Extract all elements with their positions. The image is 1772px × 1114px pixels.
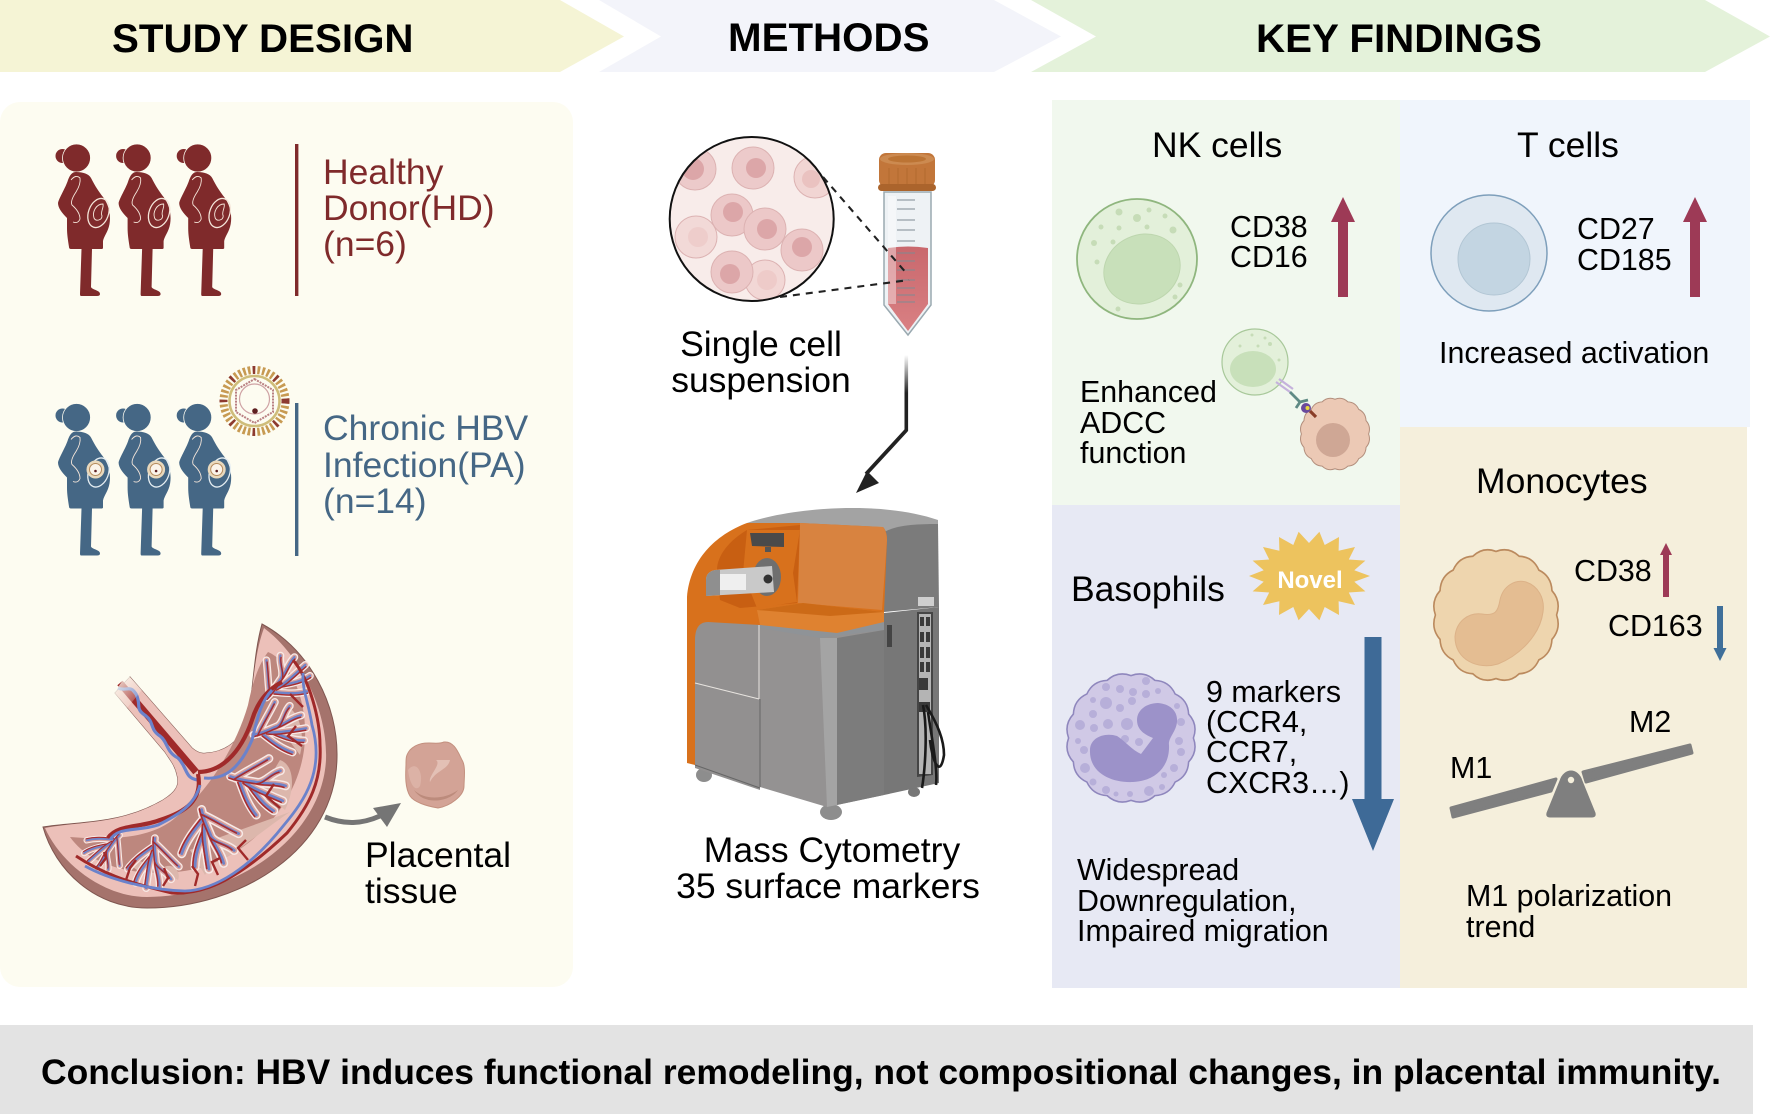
label: healthy donor: Healthy — [323, 152, 444, 192]
header: study design — [0, 0, 624, 72]
icon: NK cell with antibody engaging target — [1222, 329, 1369, 470]
label: enhanced ADCC function — [1080, 375, 1217, 470]
label: CD163 down — [1608, 606, 1726, 661]
label: CD38 CD16: CD16 — [1230, 240, 1308, 274]
icon: basophil — [1067, 674, 1195, 802]
label: placental tissue: Placental — [365, 835, 511, 875]
heading: basophils: Basophils — [1071, 569, 1225, 609]
panel: basophils — [1052, 505, 1400, 988]
panel: NK cells — [1052, 100, 1400, 505]
arrow: up — [1331, 197, 1355, 297]
label: CD38 CD16 — [1230, 210, 1308, 274]
label: widespread downregulation: Downregulation, — [1077, 884, 1297, 918]
label: enhanced ADCC function: Enhanced — [1080, 375, 1217, 409]
label: M1: M1 — [1450, 751, 1492, 785]
group: healthy donors — [56, 144, 495, 296]
label: CD38 up — [1574, 543, 1672, 597]
icon: mass cytometer — [687, 508, 944, 820]
label: CD163 down: CD163 — [1608, 609, 1703, 643]
label: enhanced ADCC function: ADCC — [1080, 406, 1166, 440]
illustration: placenta cross-section — [43, 624, 337, 908]
label: mass cytometry: 35 surface markers — [676, 866, 980, 906]
icon: three pregnant women, healthy — [56, 144, 234, 296]
arrow: to placental tissue — [325, 803, 401, 827]
label: M1 polarization trend: trend — [1466, 910, 1535, 944]
icon: monocyte — [1434, 550, 1558, 680]
label: mass cytometry — [676, 830, 980, 906]
label: M1 polarization trend — [1466, 879, 1672, 944]
icon: seesaw tilted to M1 — [1451, 745, 1692, 817]
label: placental tissue: tissue — [365, 871, 458, 911]
label: single cell suspension: suspension — [671, 360, 851, 400]
label: CD38 CD16: CD38 — [1230, 210, 1308, 244]
label: widespread downregulation: Impaired migration — [1077, 914, 1329, 948]
label: nine markers: 9 markers — [1206, 675, 1341, 709]
label: CD27 CD185 — [1577, 212, 1672, 277]
panel: monocytes — [1400, 427, 1747, 988]
icon: T cell — [1431, 195, 1547, 311]
badge: novel: Novel — [1277, 567, 1343, 594]
label: widespread downregulation — [1077, 853, 1329, 948]
label: nine markers: CXCR3…) — [1206, 766, 1350, 800]
header: study design: STUDY DESIGN — [112, 16, 414, 61]
arrow: down — [1352, 637, 1394, 851]
heading: monocytes: Monocytes — [1476, 461, 1648, 501]
header: methods — [599, 0, 1061, 72]
heading: T cells: T cells — [1517, 125, 1619, 165]
label: mass cytometry: Mass Cytometry — [704, 830, 960, 870]
group: chronic HBV infection — [56, 370, 529, 556]
icon: NK cell — [1077, 199, 1197, 319]
header: methods: METHODS — [728, 15, 930, 60]
label: healthy donor — [323, 152, 495, 264]
label: increased activation: Increased activation — [1439, 336, 1709, 370]
label: single cell suspension — [671, 324, 851, 400]
label: chronic HBV infection: Chronic HBV — [323, 408, 529, 448]
icon: hepatitis B virus — [224, 370, 286, 432]
header: key findings — [1031, 0, 1770, 72]
label: healthy donor: Donor(HD) — [323, 188, 495, 228]
label: nine markers: (CCR4, — [1206, 705, 1307, 739]
label: CD38 up: CD38 — [1574, 554, 1652, 588]
badge: novel — [1249, 532, 1370, 620]
icon: three pregnant women, infected — [56, 404, 234, 556]
label: chronic HBV infection: (n=14) — [323, 481, 427, 521]
label: CD27 CD185: CD27 — [1577, 212, 1655, 246]
arrow: up — [1683, 197, 1707, 297]
label: healthy donor: (n=6) — [323, 224, 407, 264]
label: CD27 CD185: CD185 — [1577, 243, 1672, 277]
conclusion banner — [0, 1025, 1753, 1114]
label: widespread downregulation: Widespread — [1077, 853, 1239, 887]
icon: magnified cell suspension — [670, 137, 836, 301]
panel: study design — [0, 102, 573, 987]
header: key findings: KEY FINDINGS — [1256, 16, 1542, 61]
label: chronic HBV infection: Infection(PA) — [323, 445, 526, 485]
conclusion banner: Conclusion: HBV induces functional remodeling, not compositional changes, in placental immunity. — [41, 1053, 1721, 1092]
label: M1 polarization trend: M1 polarization — [1466, 879, 1672, 913]
panel: T cells — [1400, 100, 1750, 427]
label: single cell suspension: Single cell — [680, 324, 842, 364]
panel: methods — [670, 137, 980, 906]
icon: placental tissue chunk — [406, 742, 464, 808]
label: nine markers: CCR7, — [1206, 735, 1297, 769]
zoom lines — [780, 177, 909, 297]
label: M2: M2 — [1629, 705, 1671, 739]
heading: NK cells: NK cells — [1152, 125, 1282, 165]
arrow: to mass cytometer — [856, 355, 908, 493]
label: enhanced ADCC function: function — [1080, 436, 1186, 470]
label: chronic HBV infection — [323, 408, 529, 521]
label: placental tissue — [365, 835, 511, 911]
icon: centrifuge tube — [878, 153, 936, 335]
label: nine markers — [1206, 675, 1350, 800]
